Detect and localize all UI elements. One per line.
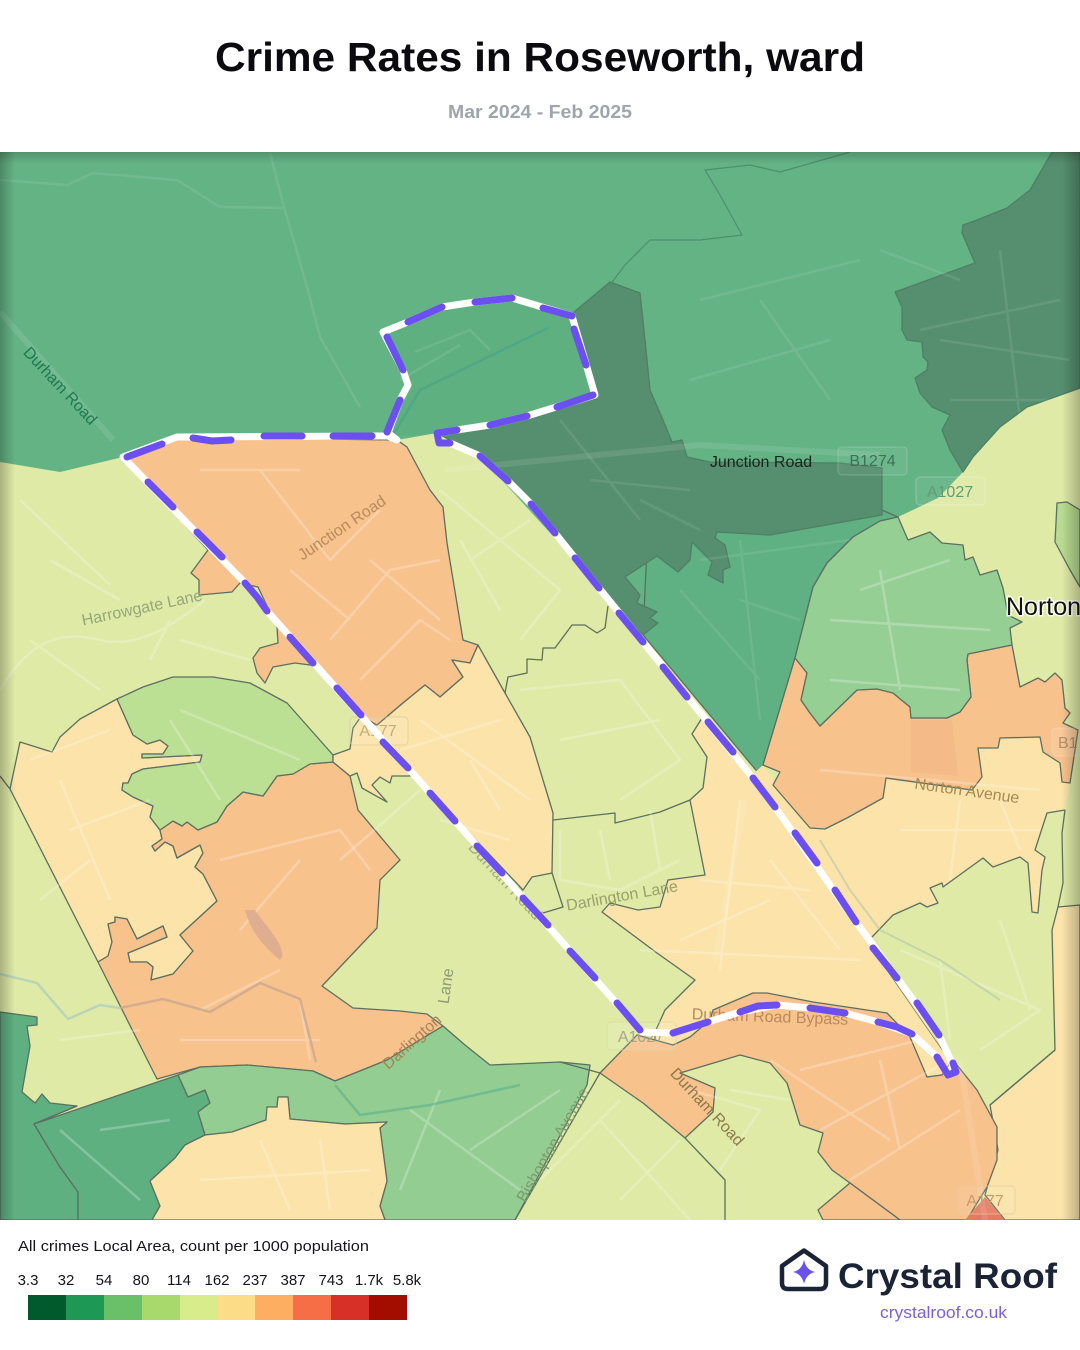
legend values: 1.7k — [355, 1272, 384, 1289]
road shield: B1: B1 — [1058, 735, 1078, 752]
logo: Crystal Roof — [782, 1250, 1057, 1322]
website: crystalroof.co.uk — [880, 1304, 1008, 1322]
map edge shading — [0, 152, 1080, 1220]
streams and water — [0, 328, 1000, 1115]
label: Bishopton Avenue: Bishopton Avenue — [514, 1085, 593, 1205]
ward outline: purple dashes — [127, 298, 956, 1075]
label: Harrowgate Lane: Harrowgate Lane — [80, 587, 204, 630]
choropleth map panel — [0, 152, 1080, 1220]
wordmark: Crystal Roof — [838, 1257, 1057, 1296]
main roads — [0, 312, 985, 1220]
pond — [245, 910, 282, 960]
road shield: A177 north — [350, 717, 408, 745]
road shield: A177 south: A177 — [966, 1193, 1004, 1210]
label: Norton: Norton — [1006, 593, 1080, 621]
ward outline: white — [123, 298, 953, 1075]
road shield: A1027 south — [607, 1022, 676, 1050]
legend values: 3.3 — [18, 1272, 38, 1289]
road shield: A177 north: A177 — [359, 723, 397, 740]
label: Durham Road centre: Durham Road — [464, 839, 545, 924]
label: Norton Avenue: Norton Avenue — [913, 776, 1020, 807]
road network — [0, 470, 1040, 1220]
map areas — [0, 152, 1080, 1220]
faint roads in green areas — [0, 153, 1070, 720]
label: Durham Road NW: Durham Road — [19, 344, 100, 429]
label: Junction Road east: Junction Road — [710, 454, 812, 471]
legend — [18, 1238, 422, 1320]
label: Junction Road: Junction Road — [295, 493, 389, 564]
legend title: All crimes Local Area, count per 1000 population — [18, 1238, 369, 1255]
icon: house with star — [782, 1250, 826, 1289]
legend colour scale — [28, 1295, 407, 1320]
legend values: 162 — [204, 1272, 230, 1289]
road shield: A1027 south: A1027 — [618, 1029, 664, 1046]
label: Darlington Lane centre: Darlington Lane — [565, 878, 679, 915]
road shield: B1274: B1274 — [849, 453, 896, 470]
legend values: 114 — [167, 1272, 191, 1289]
road shield: A1027 — [916, 477, 985, 505]
road shield: A1027: A1027 — [927, 484, 973, 501]
area boundaries — [0, 152, 1065, 1220]
legend values: 387 — [280, 1272, 306, 1289]
label: Lane south: Lane — [436, 967, 457, 1005]
ward boundary: Roseworth — [123, 298, 956, 1075]
legend values: 32 — [58, 1272, 74, 1289]
road shield: A177 south — [957, 1186, 1015, 1214]
label: Darlington south: Darlington — [380, 1012, 445, 1073]
label: Durham Road south: Durham Road — [666, 1065, 747, 1150]
legend values: 80 — [133, 1272, 149, 1289]
title: Crime Rates in Roseworth, ward — [215, 34, 865, 80]
map labels — [19, 344, 1080, 1214]
legend values — [18, 1272, 422, 1289]
legend values: 54 — [96, 1272, 112, 1289]
label: Durham Road Bypass: Durham Road Bypass — [691, 1006, 848, 1029]
legend values: 237 — [242, 1272, 268, 1289]
subtitle: date range: Mar 2024 - Feb 2025 — [448, 101, 632, 122]
legend values: 743 — [318, 1272, 344, 1289]
road shield: B1 — [1052, 728, 1080, 756]
road shield: B1274 — [838, 447, 907, 475]
legend values: 5.8k — [393, 1272, 422, 1289]
